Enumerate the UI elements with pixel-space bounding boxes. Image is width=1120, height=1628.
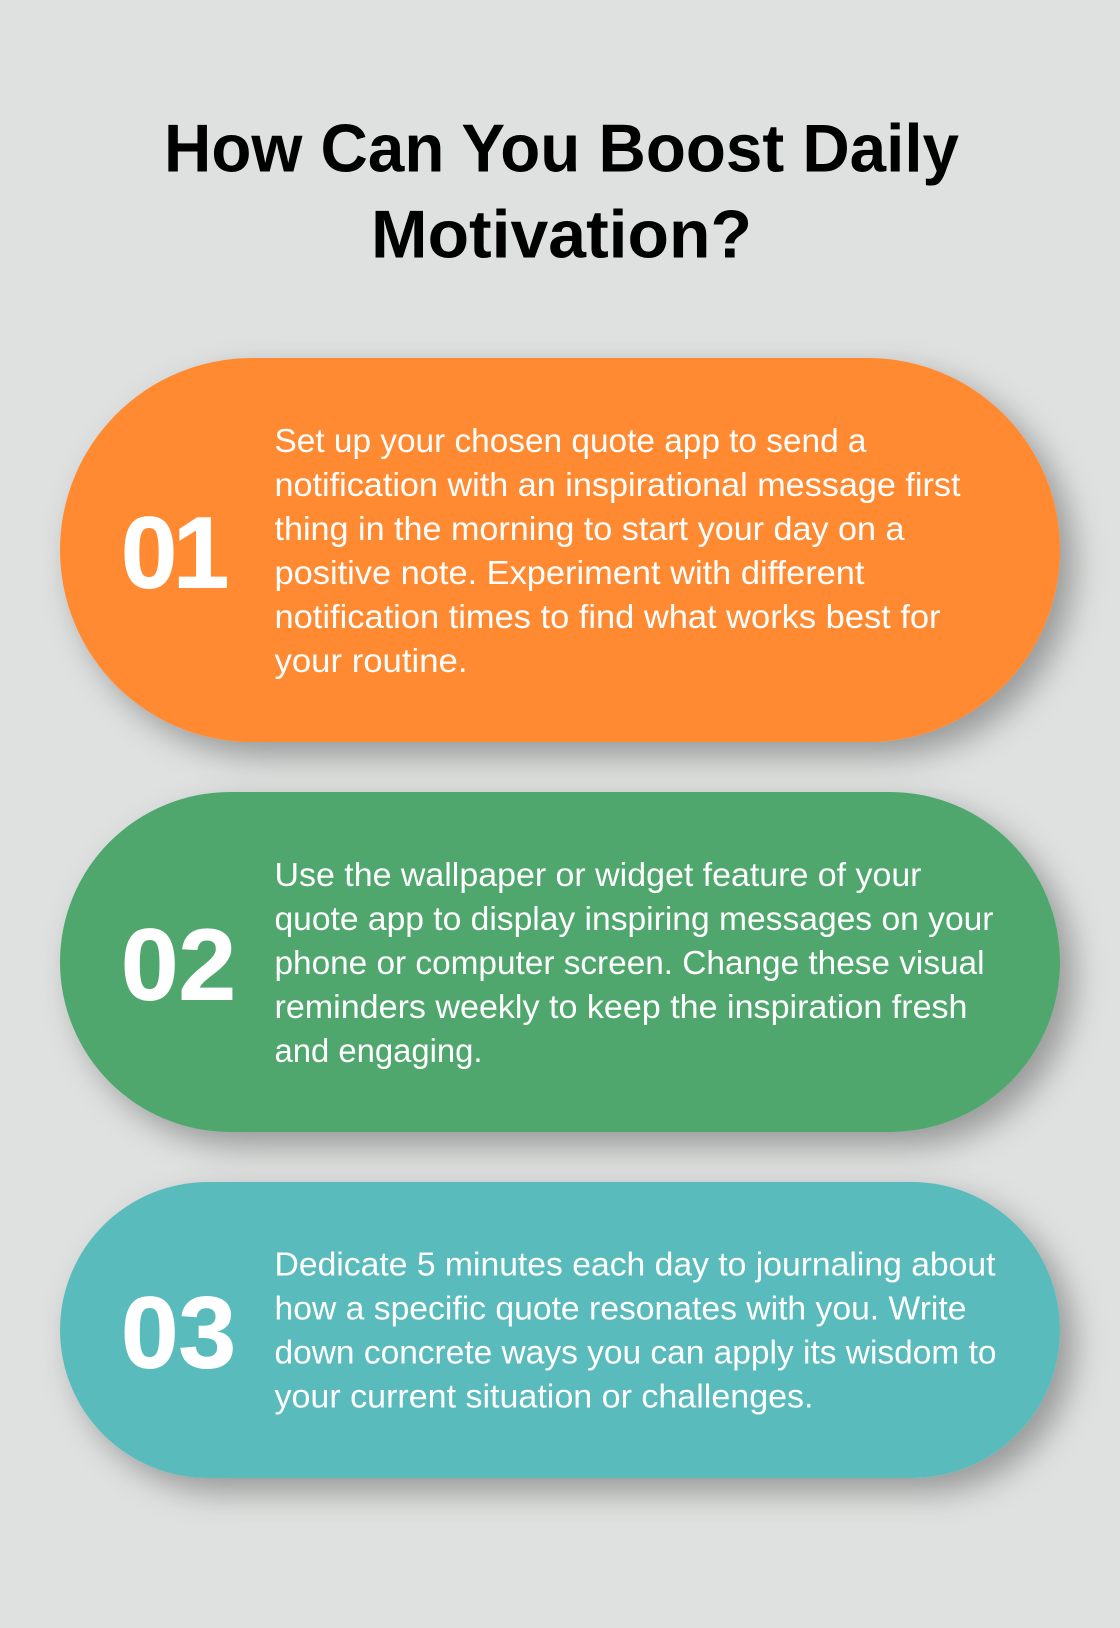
step number 01: 01 (121, 498, 229, 610)
orange pill background (60, 358, 1060, 742)
step 01 text block: Set up your chosen quote app to send a (274, 422, 867, 459)
title: How Can You Boost Daily (164, 110, 959, 186)
title (164, 110, 959, 272)
step 01 text block: notification times to find what works best for (274, 598, 941, 635)
step number 03: 03 (121, 1278, 236, 1390)
step 03 text block: down concrete ways you can apply its wisdom to (274, 1334, 996, 1370)
step 02 text block: quote app to display inspiring messages on your (274, 900, 994, 937)
step 03 text block: Dedicate 5 minutes each day to journaling about (274, 1246, 996, 1282)
step 01 text block: positive note. Experiment with different (274, 554, 864, 591)
step 03 text block: your current situation or challenges. (274, 1378, 814, 1414)
step 02 text block: phone or computer screen. Change these visual (274, 944, 984, 981)
teal pill background (60, 1182, 1060, 1478)
title: Motivation? (371, 196, 752, 272)
step 02 text block (274, 856, 994, 1069)
step 01 text block: thing in the morning to start your day on a (274, 510, 905, 547)
step 03 text block (274, 1246, 996, 1414)
step 01 text block (274, 422, 960, 679)
step 01 text block: your routine. (274, 642, 468, 679)
green pill background (60, 792, 1060, 1132)
step 03 text block: how a specific quote resonates with you. Write (274, 1290, 966, 1326)
step 02 text block: Use the wallpaper or widget feature of your (274, 856, 922, 893)
panel: step 01 (60, 358, 1060, 742)
panel: step 03 (60, 1182, 1060, 1478)
step 02 text block: and engaging. (274, 1032, 482, 1069)
step 01 text block: notification with an inspirational message first (274, 466, 960, 503)
step number 02: 02 (121, 910, 236, 1022)
step 02 text block: reminders weekly to keep the inspiration fresh (274, 988, 968, 1025)
panel: step 02 (60, 792, 1060, 1132)
